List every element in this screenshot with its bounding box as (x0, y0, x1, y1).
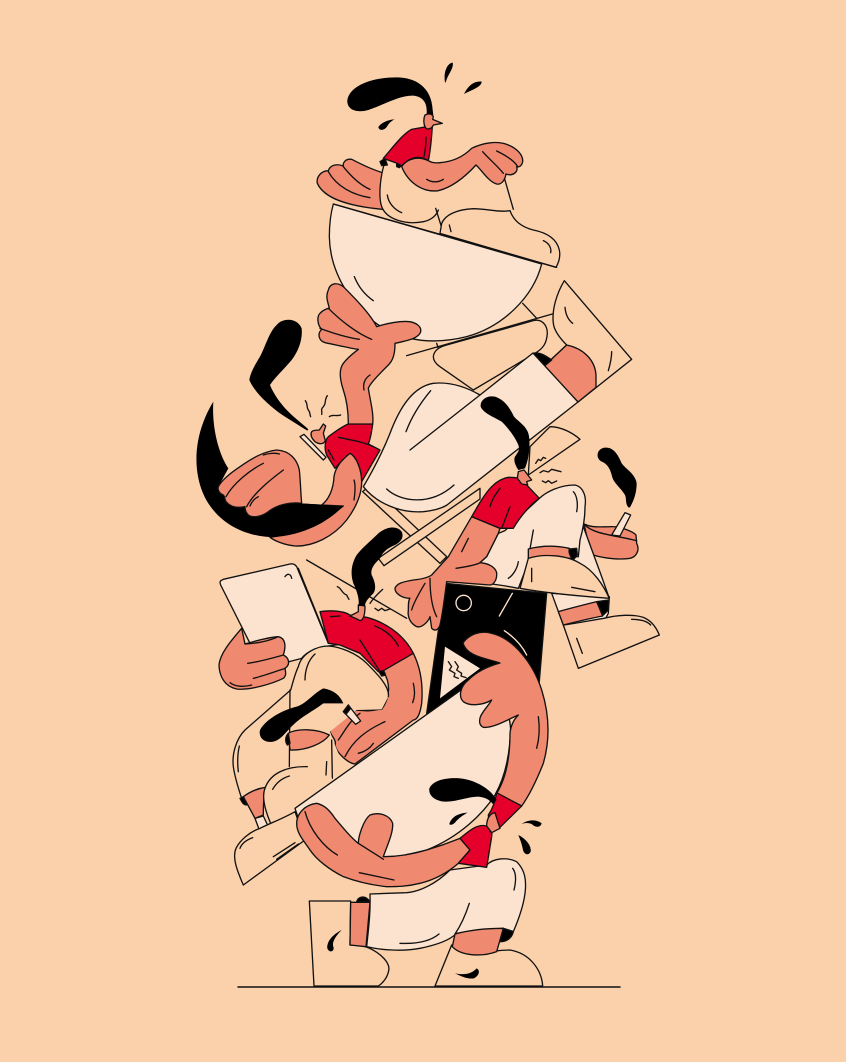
figure 4: shorts (233, 646, 388, 823)
figure 4: cigarette (343, 705, 361, 724)
figure 3: squiggles (536, 457, 561, 483)
figure 3: hair (481, 396, 529, 470)
figure 2: stress squiggles (305, 396, 341, 417)
figure 2: black hair crescent (196, 402, 343, 537)
figure 5: head (487, 813, 500, 833)
figure 5: shirt (458, 825, 492, 867)
figure 3: shorts (480, 485, 585, 588)
figure 1: sweat drops (378, 63, 482, 130)
bowl 1 (329, 204, 542, 341)
figure 1: arm (402, 143, 523, 191)
figure 2: chair legs (363, 485, 480, 566)
figure 4: small leg (243, 787, 266, 818)
figure 4: hand (219, 628, 289, 689)
figure 4: shirt (320, 611, 413, 672)
figure 4: squiggles (337, 587, 390, 611)
figure 3: arm and hand (395, 517, 500, 630)
figure 2: hair (249, 320, 308, 431)
figure 5: legs and shoes (309, 859, 543, 986)
figure 5: holding bowl (295, 632, 548, 887)
figure 2: hand (218, 450, 302, 517)
figure 1 and 2 behind bowl: peach shoes (407, 281, 632, 402)
figure 3: smoke (598, 448, 637, 507)
figure 2: lower arm (270, 453, 362, 546)
figure 5: right arm and hand (461, 632, 548, 806)
phone screen (440, 647, 480, 698)
figure 3: head (517, 470, 532, 485)
figure 5: left arm and hand (297, 803, 470, 887)
figure 4: hair (260, 688, 343, 742)
figure 4: reading with tablet (219, 528, 422, 830)
phone camera (456, 595, 471, 611)
figure 3: cigarette (612, 513, 631, 536)
figure 3: lower leg (558, 602, 603, 625)
figure 1: head (424, 114, 442, 129)
figure 5: hair (429, 778, 497, 804)
bowl 2 (295, 672, 511, 861)
figure 4: shoe (264, 767, 332, 823)
figure 4: lower shoe (235, 812, 305, 885)
figure 3: upper shoe (520, 556, 609, 598)
figure 1: shirt (380, 158, 402, 168)
figure 1: legs behind bowl (317, 63, 560, 341)
figure 4: head (350, 605, 365, 621)
figure 2: shirt (325, 424, 380, 482)
figure 3: lower shoe (563, 615, 659, 668)
figure 2: upper arm and hand over bowl (318, 284, 421, 424)
figure 4: arm and hand (330, 653, 422, 764)
phone (427, 583, 547, 713)
figure 5: sweat drops (449, 813, 542, 854)
figure 2: head (300, 434, 326, 460)
figure 3: right arm (584, 524, 638, 559)
figure 4: hair upper (352, 528, 403, 606)
figure 3: shirt (472, 477, 539, 528)
figure 1: hair (347, 77, 433, 115)
figure 2: shorts (196, 320, 578, 546)
ground line (238, 986, 620, 988)
figure 3: sitting on phone (395, 396, 659, 668)
figure 4: tablet (220, 564, 346, 662)
